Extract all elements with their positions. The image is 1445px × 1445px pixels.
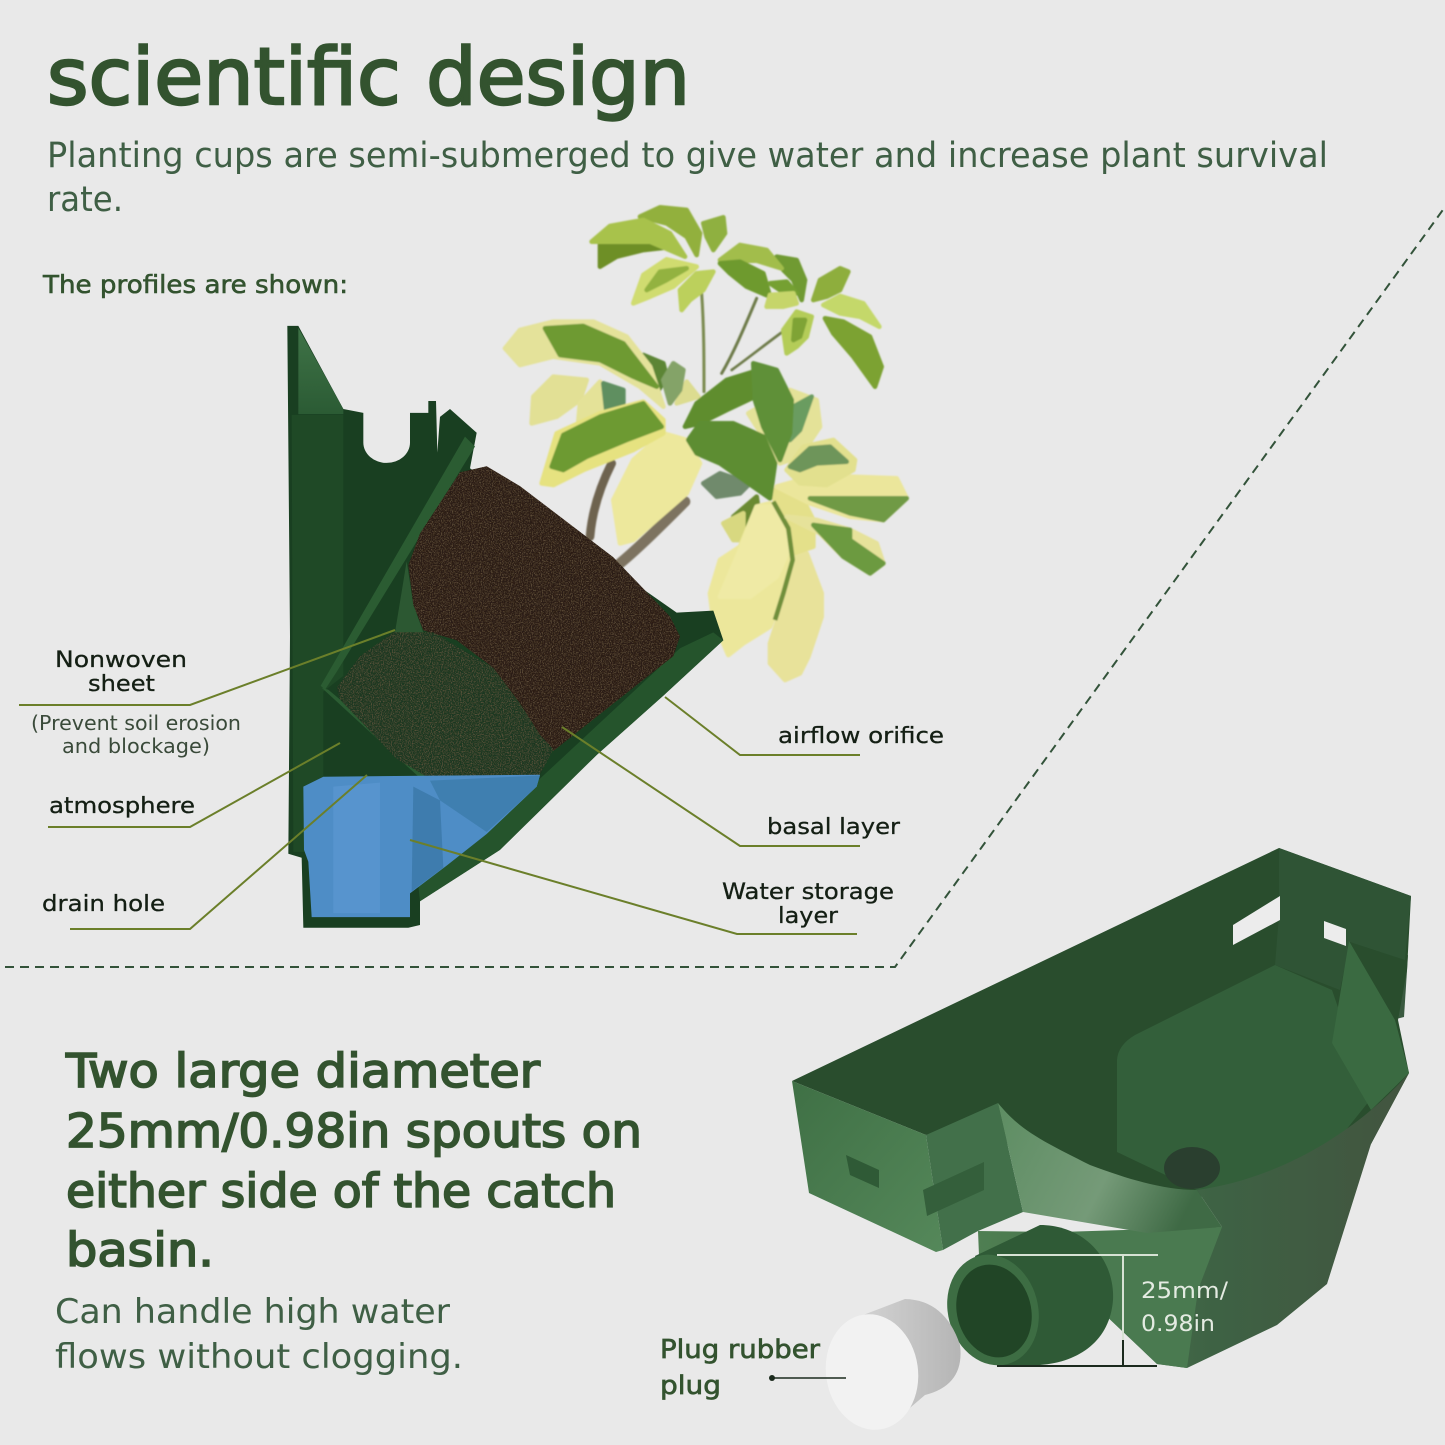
basin interior [792,848,1411,1198]
subtitle text block: Planting cups are semi-submerged to give water and increase plant survival [47,136,1328,176]
side slot [923,1162,984,1216]
label: nonwoven sheet: sheet [88,671,155,697]
drain hole dark [1164,1147,1220,1189]
diameter dimension: 25mm/ [1141,1279,1229,1304]
diameter dimension: 0.98in [1141,1312,1215,1337]
label: nonwoven sheet [55,647,187,697]
moss pocket [395,561,423,632]
left wall strip [292,415,343,852]
catch basin illustration [792,848,1411,1436]
diameter dimension [997,1255,1229,1366]
rear leaves [532,355,820,463]
wall highlight triangle [298,328,343,414]
spouts heading: basin. [66,1223,214,1277]
front leaves [542,363,792,543]
upper leaf cluster [592,207,882,387]
label: water storage layer: layer [778,903,839,929]
spouts heading: 25mm/0.98in spouts on [66,1104,642,1158]
right end wall [1275,848,1411,990]
water storage layer [303,775,540,917]
large variegated leaf top [505,322,663,407]
spout opening inner [946,1256,1042,1366]
nonwoven sheet [337,632,553,781]
right side leaves [703,440,907,573]
rubber plug body [850,1299,961,1425]
note: prevent soil erosion: and blockage) [62,734,210,758]
spout opening rim [935,1244,1051,1376]
note: prevent soil erosion: (Prevent soil erosion [31,711,241,735]
plug label: plug [660,1371,721,1401]
subtitle text block [47,136,1328,220]
spout [975,1225,1113,1365]
label: airflow orifice: airflow orifice [778,723,944,749]
plant stems [590,293,785,563]
rubber plug face [818,1308,926,1436]
cup back wall and outer shell [287,326,723,928]
square window [1324,921,1346,946]
spouts heading: Two large diameter [65,1044,540,1098]
label: water storage layer [722,879,894,929]
subtitle text block: rate. [47,180,123,220]
dashed divider [5,207,1445,967]
label: drain hole: drain hole [42,891,165,917]
spouts heading [65,1044,642,1277]
lower rim of cup [322,688,430,783]
label: nonwoven sheet: Nonwoven [55,647,187,673]
lower diagonal arm [418,632,723,901]
water facets [430,776,540,832]
hanging pale leaves [710,490,822,680]
leader lines [19,630,860,934]
flange lip [998,1103,1222,1233]
left block front face [792,1081,943,1252]
spouts description: flows without clogging. [55,1337,463,1377]
water light band [333,783,380,913]
inner raised block [1117,965,1370,1190]
spouts description: Can handle high water [55,1292,450,1332]
plug label [660,1335,846,1401]
note: prevent soil erosion [31,711,241,758]
small square hole [846,1155,879,1188]
planting cup cross-section [287,326,723,928]
back wall window [1233,896,1280,945]
water inner column [412,787,443,891]
plant illustration [505,207,907,680]
plug label: Plug rubber [660,1335,820,1365]
label: basal layer: basal layer [767,814,901,840]
outer body [978,1073,1409,1368]
funnel lower face [1060,1227,1222,1368]
label: water storage layer: Water storage [722,879,894,905]
title: scientific design [47,33,690,123]
block side face [926,1103,1023,1250]
fin [1332,941,1409,1110]
diagonal cup wall [321,437,475,690]
spouts heading: either side of the catch [66,1164,616,1218]
right outer slots [1392,955,1408,1020]
label: atmosphere: atmosphere [49,793,195,819]
profiles heading: The profiles are shown: [42,270,348,299]
spouts description [55,1292,463,1377]
soil [408,466,680,751]
